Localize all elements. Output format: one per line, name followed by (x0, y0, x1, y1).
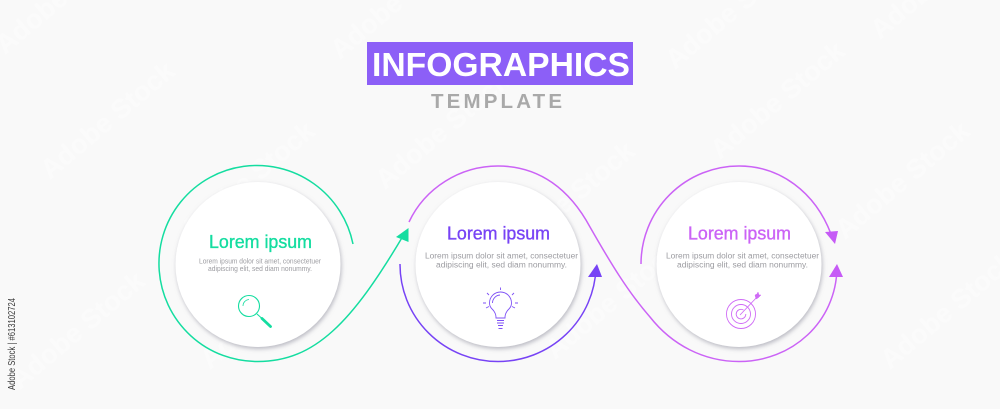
step 3 description (666, 252, 819, 270)
arrow: purple path (400, 264, 602, 362)
step 1 description: adipiscing elit, sed diam nonummy. (208, 264, 312, 273)
arrow: pink S-curve path (409, 166, 843, 362)
panel: step 3 (656, 182, 822, 347)
step 1 description (199, 256, 322, 273)
watermark pattern: Adobe Stock (370, 65, 516, 195)
subtitle: TEMPLATE (431, 90, 562, 113)
icon: light bulb (483, 288, 518, 328)
watermark pattern: Adobe Stock (195, 245, 341, 375)
step 3 heading: Lorem ipsum (688, 224, 791, 244)
stock id: Adobe Stock | #613102724 (6, 298, 18, 390)
step 3 description: Lorem ipsum dolor sit amet, consectetuer (666, 252, 819, 260)
watermark pattern: Adobe Stock (5, 265, 151, 395)
step 2 description (425, 252, 578, 270)
step 3 circle (656, 182, 822, 347)
panel: step 2 (416, 182, 580, 347)
step 1 heading: Lorem ipsum (209, 232, 312, 252)
arrow: pink top arc (641, 166, 838, 264)
icon: magnifying glass (238, 296, 270, 326)
step 2 circle (416, 182, 580, 347)
panel: step 1 (176, 182, 340, 347)
watermark pattern: Adobe Stock (540, 235, 686, 365)
step 2 heading: Lorem ipsum (447, 224, 550, 244)
step 3 description: adipiscing elit, sed diam nonummy. (677, 260, 808, 270)
watermark pattern: Adobe Stock (35, 55, 181, 185)
arrow: green path (159, 166, 408, 362)
icon: target with arrow (726, 292, 761, 328)
watermark pattern: Adobe Stock (705, 35, 851, 165)
step 1 circle (176, 182, 340, 347)
watermark pattern: Adobe Stock (175, 115, 321, 245)
step 1 description: Lorem ipsum dolor sit amet, consectetuer (199, 256, 322, 266)
watermark pattern: Adobe Stock (830, 115, 976, 245)
step 2 description: Lorem ipsum dolor sit amet, consectetuer (425, 252, 578, 260)
watermark pattern: Adobe Stock (495, 135, 641, 265)
step 2 description: adipiscing elit, sed diam nonummy. (436, 260, 567, 270)
title banner: INFOGRAPHICS (372, 47, 630, 84)
